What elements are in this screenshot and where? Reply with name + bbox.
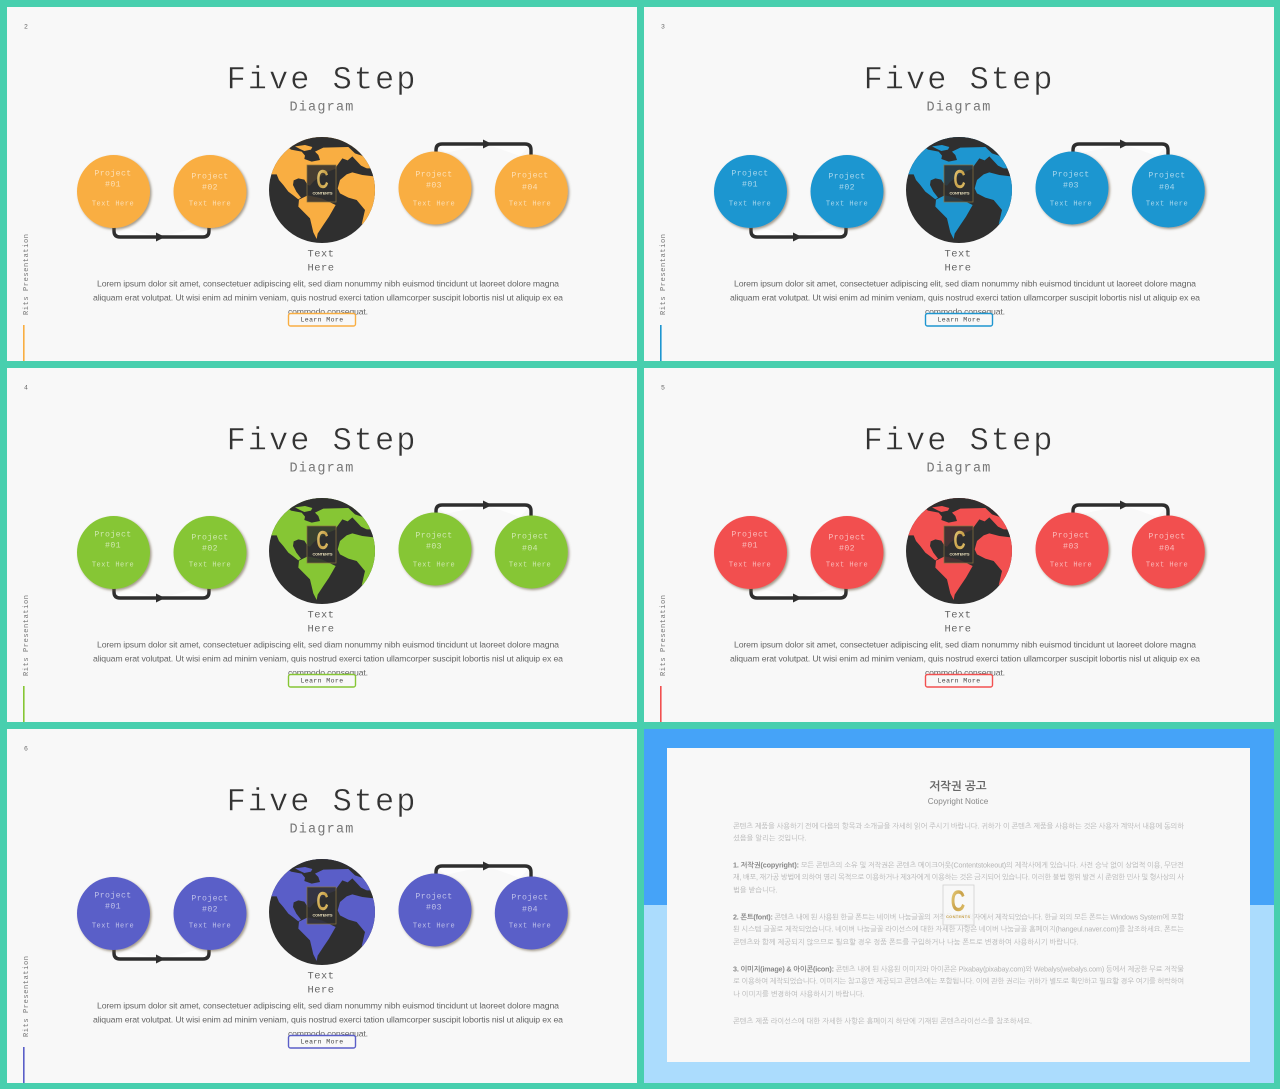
body text [730, 640, 1200, 678]
body text [93, 1000, 563, 1038]
project circle 02: #02 [202, 906, 218, 914]
project circle 02: Text Here [189, 562, 231, 570]
side label: Rits Presentation [660, 233, 668, 315]
project circle 02: #02 [839, 544, 855, 554]
slide 4: green five step diagram [7, 368, 637, 722]
body text: commodo consequat. [288, 306, 368, 316]
globe with logo: C [316, 525, 329, 555]
body text: aliquam erat volutpat. Ut wisi enim ad minim veniam, quis nostrud exerci tation ullamcorper suscipit lobortis nisl ut aliquip ex ea [730, 292, 1200, 302]
project circle 01: Text Here [92, 200, 134, 208]
project circle 03: #03 [1063, 182, 1079, 190]
title: Five Step [864, 422, 1054, 460]
learn more button [288, 1036, 356, 1048]
logo watermark: C [951, 885, 965, 918]
globe caption: Here [308, 984, 334, 996]
project circle 03: Text Here [413, 562, 455, 570]
learn more button: Learn More [300, 316, 344, 324]
body text: commodo consequat. [925, 668, 1005, 678]
connector: project 3 to 4 [1073, 500, 1168, 517]
project circle 04: Text Here [1146, 562, 1188, 570]
project circle 02: #02 [202, 544, 218, 554]
project circle 01: #01 [742, 542, 758, 550]
slide 3: blue five step diagram [644, 7, 1274, 361]
clause 2: font: 2. 폰트(font): 콘텐츠 내에 된 사용된 한글 폰트는 네이버 나눔글꼴의 저작물로 제작자에서 제작되었습니다. 한글 외의 모든 폰트는 Windows System에 포함 [733, 912, 1184, 922]
title: Five Step [864, 62, 1054, 98]
accent bar [660, 686, 662, 722]
globe with logo: C [316, 886, 329, 916]
project circle 04: #04 [522, 544, 538, 554]
project circle 02: Text Here [826, 200, 868, 208]
project circle 03: #03 [426, 542, 442, 552]
project circle 04 [495, 876, 568, 950]
project circle 03: Text Here [1050, 562, 1092, 570]
globe with logo: CONTENTS [950, 192, 970, 196]
globe with logo: CONTENTS [312, 552, 333, 556]
copyright subheading: Copyright Notice [928, 797, 989, 806]
project circle 03: Project [415, 530, 453, 540]
title: Five Step [227, 784, 417, 820]
globe caption: Here [308, 262, 334, 274]
clause 3: image and icon [733, 964, 1184, 998]
project circle 03: Text Here [413, 200, 455, 208]
project circle 01: Text Here [92, 562, 134, 570]
project circle 01: #01 [742, 180, 758, 190]
clause 2: font [733, 912, 1184, 946]
body text: commodo consequat. [288, 668, 368, 678]
learn more button: Learn More [300, 1038, 344, 1046]
body text [730, 278, 1200, 316]
body text: Lorem ipsum dolor sit amet, consectetuer adipiscing elit, sed diam nonummy nibh euismod tincidunt ut laoreet dolore magna [97, 1000, 559, 1010]
project circle 03 [398, 874, 472, 946]
subtitle: Diagram [289, 822, 355, 838]
project circle 01: Text Here [729, 200, 771, 208]
connector: project 1 to 2 [113, 226, 209, 242]
globe with logo [906, 498, 1012, 604]
clause 1: copyright [733, 860, 1184, 894]
accent bar [660, 325, 662, 361]
globe caption [308, 970, 334, 996]
globe with logo: CONTENTS [312, 914, 333, 918]
body text: Lorem ipsum dolor sit amet, consectetuer adipiscing elit, sed diam nonummy nibh euismod tincidunt ut laoreet dolore magna [734, 278, 1196, 288]
connector: project 3 to 4 [436, 500, 531, 517]
globe caption: Text [308, 610, 334, 622]
body text [93, 640, 563, 678]
project circle 01: #01 [105, 902, 121, 912]
side label: Rits Presentation [23, 233, 31, 315]
project circle 02: Project [828, 172, 866, 182]
globe caption [308, 610, 334, 636]
page number: 5 [661, 384, 665, 392]
connector: project 1 to 2 [750, 226, 846, 242]
project circle 04: Text Here [509, 922, 551, 930]
globe with logo [269, 498, 375, 604]
accent bar [23, 686, 25, 722]
body text: commodo consequat. [925, 306, 1005, 316]
project circle 02: Project [191, 532, 229, 542]
project circle 04: #04 [522, 906, 538, 914]
page number: 4 [24, 384, 28, 392]
project circle 04: Project [1148, 532, 1186, 542]
subtitle: Diagram [926, 462, 992, 476]
intro paragraph: 콘텐츠 제품을 사용하기 전에 다음의 항목과 소개글을 자세히 읽어 주시기 바랍니다. 귀하가 이 콘텐츠 제품을 사용하는 것은 사용자 계약서 내용에 동의하 [733, 822, 1184, 830]
body text [93, 278, 563, 316]
body text: aliquam erat volutpat. Ut wisi enim ad minim veniam, quis nostrud exerci tation ullamcorper suscipit lobortis nisl ut aliquip ex ea [93, 292, 563, 302]
learn more button: Learn More [937, 316, 981, 324]
project circle 03: #03 [426, 182, 442, 190]
project circle 01: Project [94, 890, 132, 900]
project circle 03 [1036, 152, 1108, 224]
project circle 04: Text Here [509, 200, 551, 208]
clause 2: font: 된 시스템 글꼴로 제작되었습니다. 네이버 나눔글꼴 라이선스에 대한 자세한 사항은 네이버 나눔글꼴 홈페이지(hangeul.naver.com)를 참조하세요. 폰트는 [733, 924, 1184, 934]
connector: project 1 to 2 [113, 948, 209, 964]
globe caption: Here [945, 262, 971, 274]
globe caption: Here [308, 624, 334, 636]
learn more button: Learn More [300, 678, 344, 684]
learn more button [926, 314, 992, 326]
project circle 02: Project [191, 172, 229, 182]
clause 1: copyright: 재, 배포, 재가공 방법에 의하여 영리 목적으로 이용하거나 제3자에게 이용하는 것은 금지되어 있습니다. 이러한 불법 행위 발견 시 준엄한 민사 및 형사상의 사 [733, 872, 1184, 882]
side label: Rits Presentation [23, 955, 31, 1037]
learn more button: Learn More [937, 678, 981, 684]
globe with logo [906, 137, 1012, 243]
subtitle: Diagram [926, 100, 992, 116]
project circle 03 [398, 152, 472, 224]
copyright heading: 저작권 공고 [929, 780, 987, 793]
project circle 02 [810, 155, 884, 228]
connector: project 3 to 4 [436, 140, 531, 156]
project circle 03 [1036, 512, 1108, 586]
project circle 04: Project [1148, 170, 1186, 180]
side label: Rits Presentation [660, 594, 668, 676]
clause 3: image and icon: 나 이미지를 변경하여 사용하시기 바랍니다. [733, 990, 865, 998]
side label: Rits Presentation [23, 594, 31, 676]
project circle 01: #01 [105, 542, 121, 550]
project circle 02 [810, 516, 884, 589]
project circle 03: Text Here [413, 922, 455, 930]
learn more button [288, 674, 356, 687]
project circle 04: #04 [1159, 184, 1175, 192]
project circle 02 [174, 516, 246, 589]
body text: aliquam erat volutpat. Ut wisi enim ad minim veniam, quis nostrud exerci tation ullamcorper suscipit lobortis nisl ut aliquip ex ea [93, 1014, 563, 1024]
intro paragraph [733, 822, 1184, 842]
globe with logo: C [316, 164, 329, 194]
project circle 04 [1132, 154, 1205, 228]
globe with logo: CONTENTS [312, 192, 333, 196]
accent bar [23, 1047, 25, 1083]
globe caption: Text [945, 610, 971, 622]
project circle 04 [495, 516, 568, 588]
project circle 04 [1132, 516, 1205, 588]
globe with logo [269, 859, 375, 965]
project circle 02: Project [191, 894, 229, 904]
project circle 03: Project [415, 892, 453, 902]
project circle 03: Project [1052, 530, 1090, 540]
slide 2: orange five step diagram [7, 7, 637, 361]
globe with logo [269, 137, 375, 243]
globe with logo: CONTENTS [950, 552, 970, 556]
body text: Lorem ipsum dolor sit amet, consectetuer adipiscing elit, sed diam nonummy nibh euismod tincidunt ut laoreet dolore magna [97, 278, 559, 288]
connector: project 3 to 4 [1073, 140, 1168, 156]
project circle 02: Text Here [189, 200, 231, 208]
project circle 02: #02 [202, 184, 218, 192]
globe caption [308, 248, 334, 274]
slide 5: red five step diagram [644, 368, 1274, 722]
connector: project 1 to 2 [113, 587, 209, 602]
globe caption: Text [308, 248, 334, 260]
body text: aliquam erat volutpat. Ut wisi enim ad minim veniam, quis nostrud exerci tation ullamcorper suscipit lobortis nisl ut aliquip ex ea [93, 654, 563, 664]
accent bar [23, 325, 25, 361]
project circle 01: Text Here [729, 562, 771, 570]
project circle 02 [174, 155, 246, 228]
globe with logo: C [953, 164, 966, 194]
project circle 04: #04 [522, 184, 538, 192]
project circle 01 [77, 877, 150, 950]
license footer note: 콘텐츠 제품 라이선스에 대한 자세한 사항은 홈페이지 하단에 기재된 콘텐츠라이선스를 참조하세요. [733, 1016, 1032, 1026]
project circle 04: Project [511, 892, 549, 902]
logo watermark [943, 885, 974, 925]
project circle 04 [495, 154, 568, 228]
title: Five Step [227, 422, 417, 460]
project circle 03: Project [415, 170, 453, 180]
project circle 01: Project [731, 530, 769, 540]
project circle 02: Project [828, 532, 866, 542]
globe caption [945, 610, 971, 636]
body text: commodo consequat. [288, 1028, 368, 1038]
clause 3: image and icon: 3. 이미지(image) & 아이콘(icon): 콘텐츠 내에 된 사용된 이미지와 아이콘은 Pixabay(pixabay.com)와 Webalys(webalys.com) 등에서 제공한 무료 저작물 [733, 964, 1184, 974]
slide 6: purple five step diagram [7, 729, 637, 1083]
page number: 2 [24, 24, 28, 30]
globe caption: Here [945, 624, 971, 636]
project circle 01 [77, 155, 150, 228]
subtitle: Diagram [289, 100, 355, 116]
project circle 03: #03 [426, 904, 442, 912]
project circle 02: Text Here [826, 562, 868, 570]
project circle 04: Project [511, 532, 549, 542]
project circle 01 [714, 516, 787, 589]
globe caption: Text [308, 970, 334, 982]
project circle 02: Text Here [189, 922, 231, 930]
clause 3: image and icon: 로 이용하여 제작되었습니다. 이미지는 참고용만 제공되고 콘텐츠에는 포함됩니다. 이에 관한 권리는 귀하가 별도로 확인하고 필요할 경우 여기를 허락하여 [733, 976, 1184, 986]
panel: copyright notice slide [644, 729, 1274, 1083]
learn more button [926, 674, 992, 687]
clause 1: copyright: 법을 받습니다. [733, 886, 778, 894]
title: Five Step [227, 62, 417, 98]
connector: project 3 to 4 [436, 862, 531, 878]
project circle 01: Text Here [92, 922, 134, 930]
project circle 03: Text Here [1050, 200, 1092, 208]
connector: project 1 to 2 [750, 587, 846, 602]
body text: Lorem ipsum dolor sit amet, consectetuer adipiscing elit, sed diam nonummy nibh euismod tincidunt ut laoreet dolore magna [97, 640, 559, 650]
project circle 03 [398, 512, 472, 586]
project circle 04: Text Here [1146, 200, 1188, 208]
project circle 01 [77, 516, 150, 589]
page number: 6 [24, 746, 28, 752]
globe with logo: C [953, 525, 966, 555]
project circle 01: Project [94, 168, 132, 178]
project circle 01: Project [94, 530, 132, 540]
project circle 02: #02 [839, 184, 855, 192]
learn more button [288, 314, 356, 326]
project circle 04: Project [511, 170, 549, 180]
page number: 3 [661, 24, 665, 30]
globe caption: Text [945, 248, 971, 260]
project circle 01 [714, 155, 787, 228]
body text: Lorem ipsum dolor sit amet, consectetuer adipiscing elit, sed diam nonummy nibh euismod tincidunt ut laoreet dolore magna [734, 640, 1196, 650]
project circle 01: #01 [105, 180, 121, 190]
project circle 04: #04 [1159, 544, 1175, 554]
intro paragraph: 셨음을 알리는 것입니다. [733, 834, 807, 842]
project circle 04: Text Here [509, 562, 551, 570]
subtitle: Diagram [289, 462, 355, 476]
project circle 01: Project [731, 168, 769, 178]
clause 1: copyright: 1. 저작권(copyright): 모든 콘텐츠의 소유 및 저작권은 콘텐츠 메이크어웃(Contentstokeout)의 제작사에게 있습니다. 사전 승낙 없이 상업적 이용, 무단전 [733, 860, 1184, 870]
project circle 02 [174, 877, 246, 950]
project circle 03: Project [1052, 170, 1090, 180]
project circle 03: #03 [1063, 542, 1079, 552]
logo watermark: CONTENTS [946, 914, 970, 919]
clause 2: font: 콘텐츠와 함께 제공되지 않으므로 필요할 경우 정품 폰트를 구입하거나 나눔 폰트로 변경하여 사용하시기 바랍니다. [733, 938, 1079, 946]
body text: aliquam erat volutpat. Ut wisi enim ad minim veniam, quis nostrud exerci tation ullamcorper suscipit lobortis nisl ut aliquip ex ea [730, 654, 1200, 664]
globe caption [945, 248, 971, 274]
